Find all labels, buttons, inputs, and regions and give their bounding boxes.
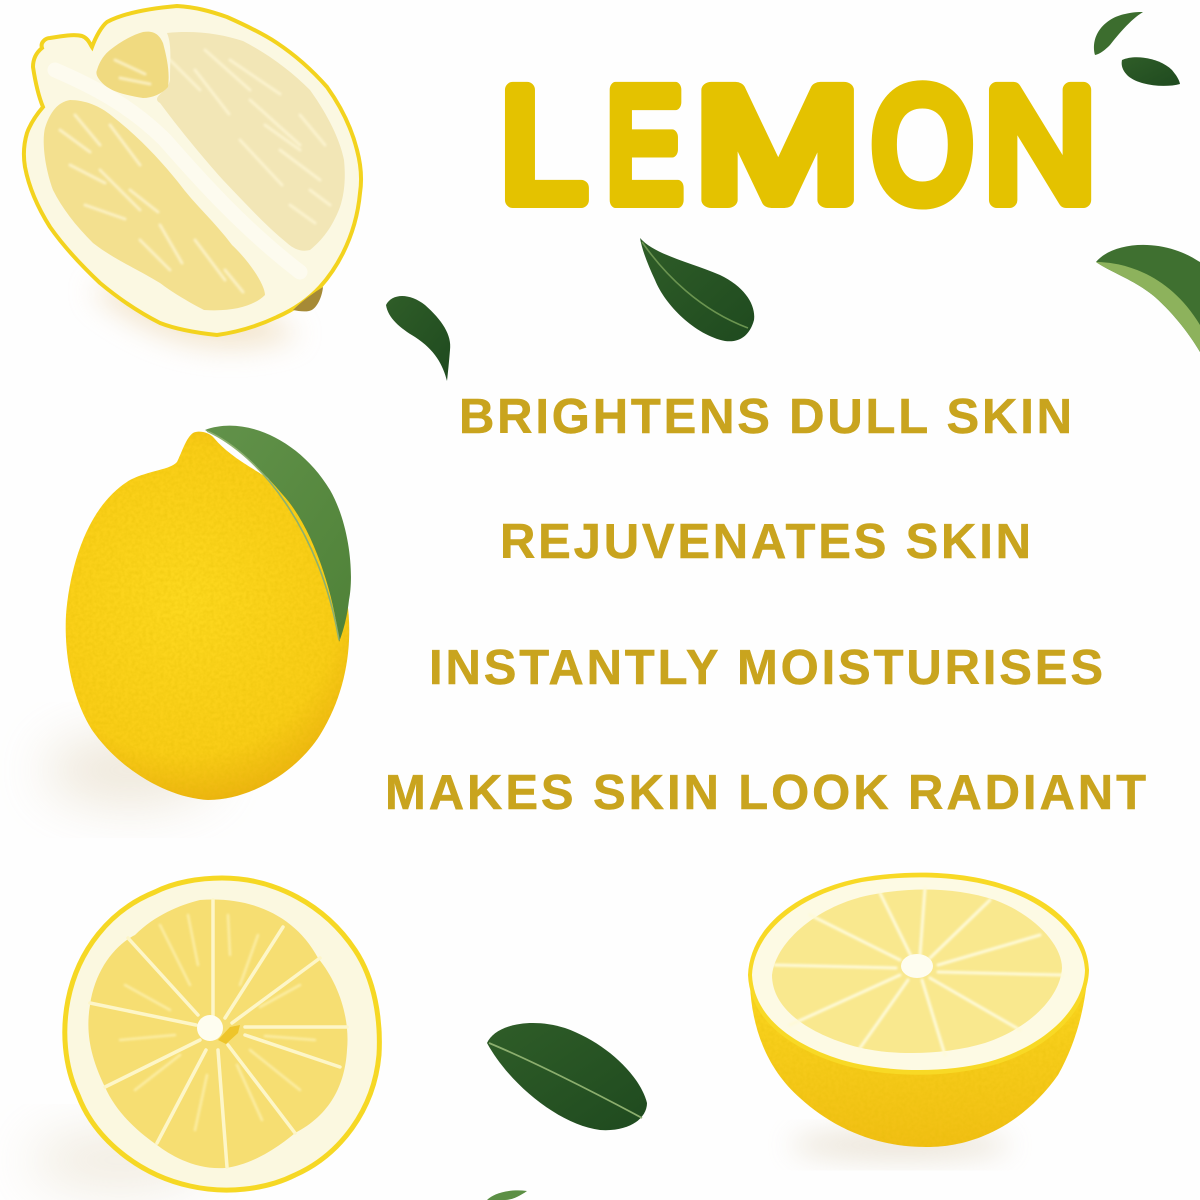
lemon body — [66, 432, 349, 800]
benefit 2: REJUVENATES SKIN — [500, 515, 1031, 569]
pulp highlights — [120, 915, 315, 1130]
lemon half dome: bottom-right — [748, 873, 1089, 1159]
title: LEMON: L — [500, 56, 586, 235]
lemon half: top-left — [24, 6, 361, 348]
benefit 1: BRIGHTENS DULL SKIN — [459, 390, 1072, 444]
core — [901, 954, 933, 978]
rind — [65, 878, 379, 1190]
membranes — [90, 900, 347, 1167]
peel — [750, 970, 1088, 1147]
title: LEMON — [500, 55, 1096, 235]
leaf: bottom — [487, 1023, 647, 1130]
segment: lower-left — [44, 100, 265, 310]
pith — [752, 877, 1085, 1070]
segment: upper-right — [157, 32, 345, 251]
leaf: top right small 2 — [1122, 57, 1180, 86]
leaf: centre — [640, 238, 754, 341]
pulp — [772, 890, 1062, 1053]
segment: small top — [96, 32, 169, 98]
leaf — [205, 426, 351, 642]
title: LEMON: N — [984, 56, 1096, 235]
benefit 3: INSTANTLY MOISTURISES — [429, 641, 1103, 695]
leaf: top right small 1 — [1094, 12, 1143, 55]
core — [197, 1015, 223, 1041]
rind — [24, 6, 361, 335]
pulp — [88, 899, 348, 1168]
benefit 4: MAKES SKIN LOOK RADIANT — [385, 766, 1146, 820]
central membrane — [55, 70, 300, 272]
lemon slice: bottom-left — [30, 878, 379, 1190]
pulp vesicles — [60, 50, 330, 292]
title: LEMON: O — [872, 55, 973, 234]
leaf: small left — [386, 296, 450, 381]
title: LEMON: E — [606, 55, 683, 234]
benefits list — [385, 390, 1146, 820]
membranes — [775, 888, 1062, 1055]
title: LEMON: M — [695, 56, 860, 235]
stem — [293, 287, 323, 311]
leaf: right edge — [1096, 245, 1200, 352]
whole lemon with leaf — [45, 426, 351, 804]
rim — [748, 873, 1089, 1075]
leaf: bottom tiny — [487, 1190, 527, 1200]
